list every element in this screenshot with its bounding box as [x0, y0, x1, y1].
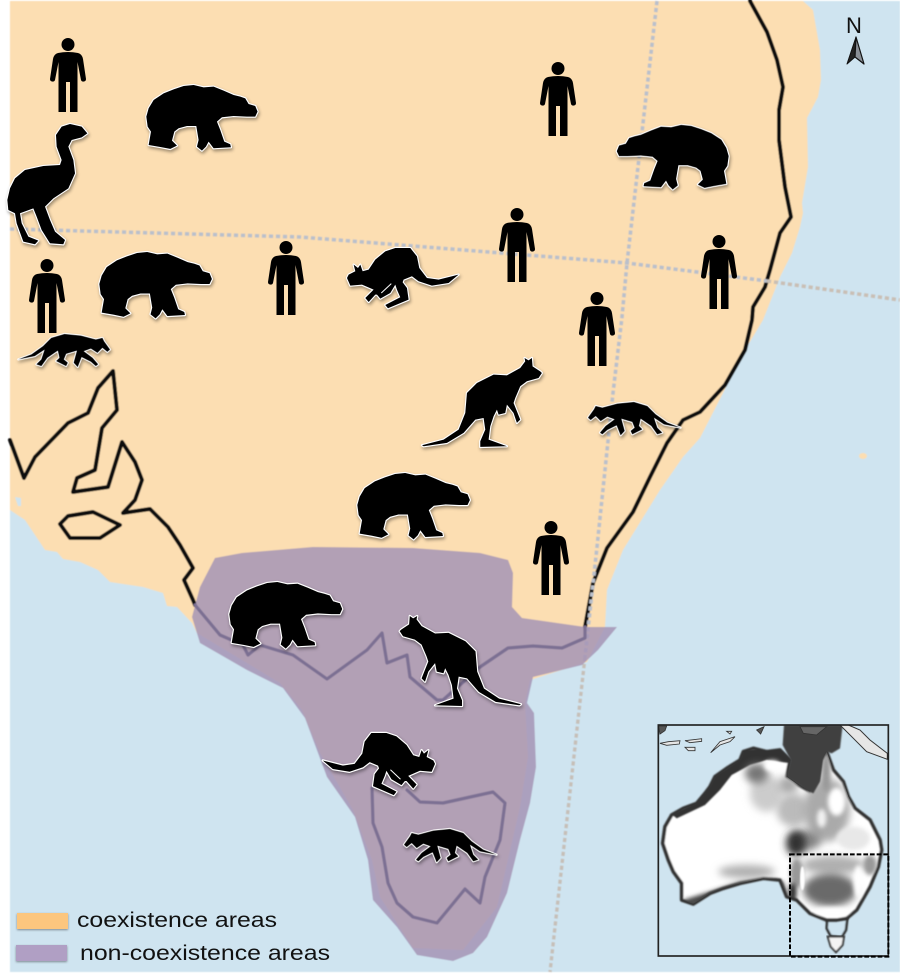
giant wombat icons	[99, 85, 729, 649]
inset elevation shading	[672, 747, 877, 916]
inset sea	[658, 725, 888, 956]
inset dashed extent box	[790, 854, 888, 957]
thylacine icons	[18, 334, 681, 862]
kangaroo icons	[323, 248, 542, 795]
legend	[16, 908, 330, 965]
inset New Guinea strip	[840, 725, 887, 759]
dotted longitude line	[585, 1, 657, 657]
inset islands	[658, 726, 827, 753]
inset Tasmania	[828, 937, 844, 952]
borders inside non-coexistence area	[195, 605, 585, 923]
human icons	[29, 38, 737, 595]
arrow	[847, 37, 864, 64]
legend label: non-coexistence: non-coexistence areas	[80, 941, 330, 965]
legend label: coexistence: coexistence areas	[77, 908, 277, 932]
dotted longitude line south	[550, 657, 585, 972]
small lake	[15, 497, 21, 506]
dotted latitude line over land	[10, 229, 767, 281]
inset frame	[658, 725, 888, 956]
legend swatch: coexistence	[17, 913, 68, 929]
state border lines	[10, 1, 791, 627]
dotted latitude line over sea	[767, 281, 900, 300]
inset Bass Strait ring	[827, 918, 847, 937]
non-coexistence area	[192, 547, 617, 961]
inset northern dark area	[783, 725, 843, 793]
small island	[859, 453, 867, 459]
N label: N	[846, 13, 862, 38]
legend swatch: non-coexistence	[16, 945, 67, 961]
north arrow	[846, 13, 864, 64]
inset Australia landmass	[663, 748, 882, 920]
inset map of Australia	[658, 725, 888, 957]
flightless bird icon	[7, 124, 87, 244]
